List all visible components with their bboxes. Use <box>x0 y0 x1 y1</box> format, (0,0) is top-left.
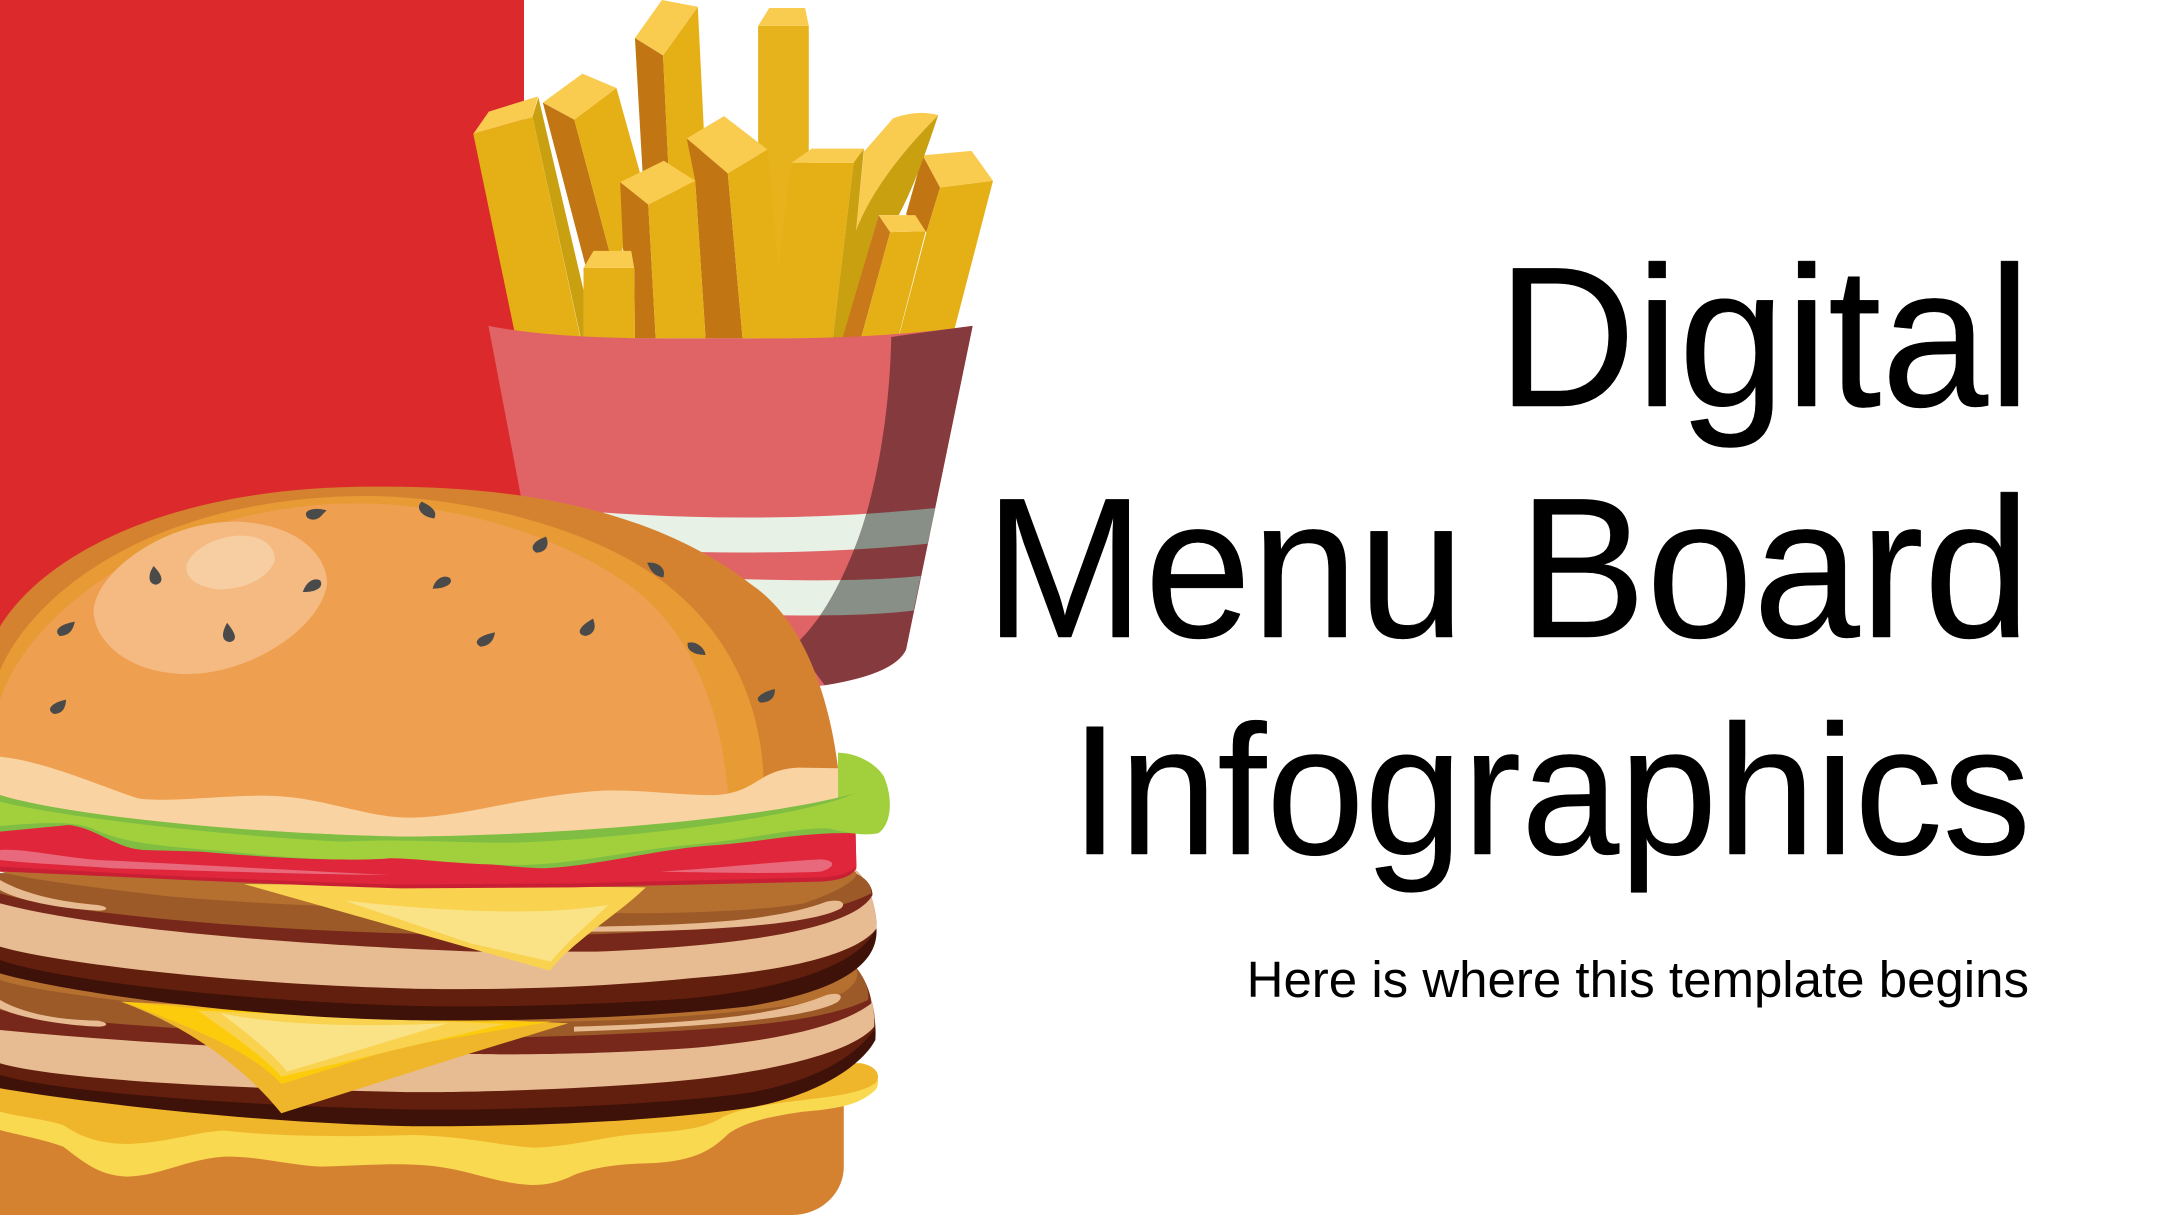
top bun <box>0 487 855 843</box>
red background panel <box>0 0 524 700</box>
lower patty <box>0 967 876 1126</box>
curved fry <box>833 113 938 338</box>
lower cheese slice <box>121 1002 568 1113</box>
upper patty <box>0 870 877 1021</box>
subtitle: Here is where this template begins <box>1247 951 2029 1008</box>
fries in a box <box>473 0 993 696</box>
burger <box>0 487 890 1215</box>
right fry <box>899 151 993 337</box>
upper cheese slice <box>244 884 646 971</box>
title line 3: Infographics <box>1071 688 2031 894</box>
lettuce <box>0 753 890 868</box>
tomato <box>0 820 856 888</box>
back fries <box>543 0 809 338</box>
illustration: fries and burger <box>0 0 993 1215</box>
title <box>985 226 2031 894</box>
left large fry <box>473 96 584 338</box>
title line 1: Digital <box>1497 226 2031 449</box>
fries box <box>488 326 973 696</box>
centre fries <box>584 116 926 338</box>
cream bun edge <box>0 757 838 837</box>
bun highlight <box>94 522 327 674</box>
title line 2: Menu Board <box>985 457 2031 680</box>
lettuce shadow <box>0 793 855 843</box>
sesame seeds <box>51 503 774 713</box>
bottom bun <box>0 1063 878 1215</box>
